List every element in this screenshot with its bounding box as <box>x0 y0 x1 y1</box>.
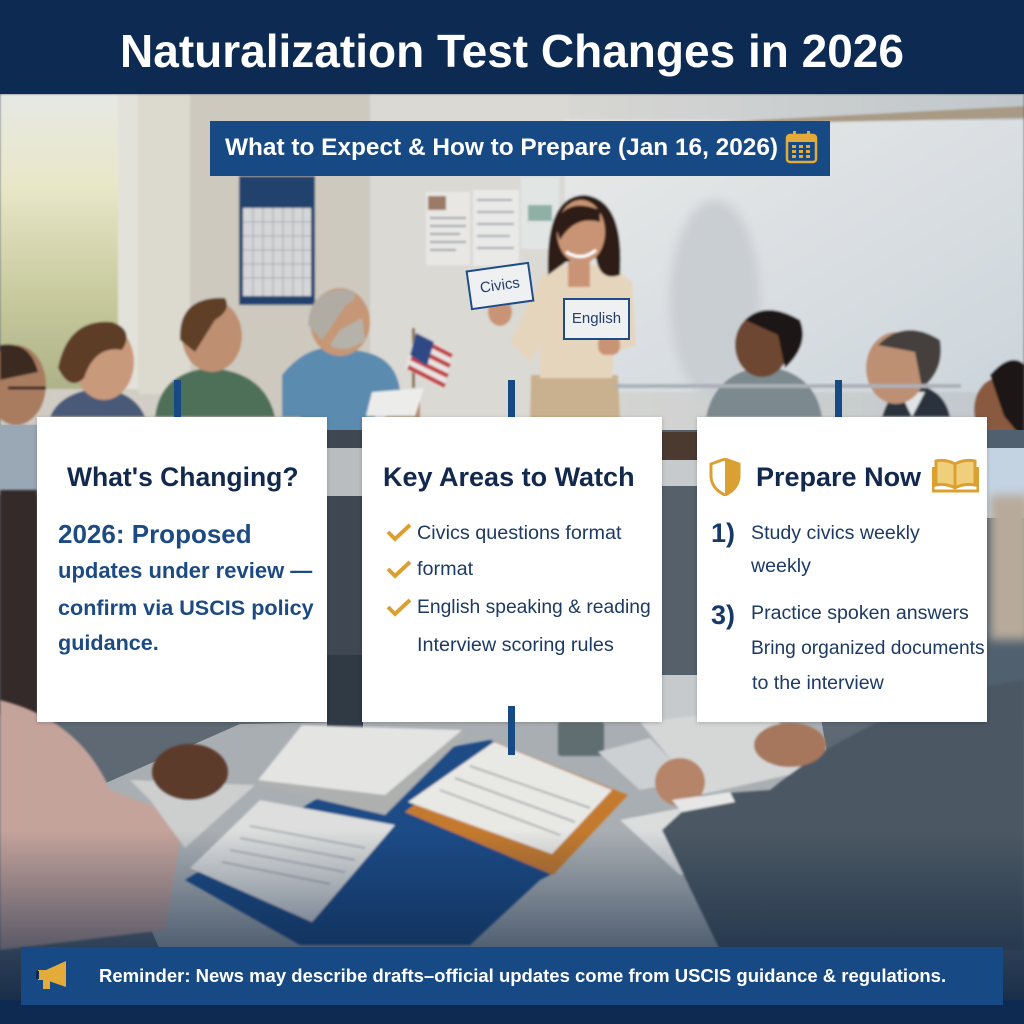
icon: megaphone <box>36 961 66 989</box>
checklist: format <box>417 558 473 580</box>
subtitle: What to Expect & How to Prepare (Jan 16, 2026) <box>225 134 778 161</box>
flag <box>412 328 415 388</box>
left person foreground <box>0 700 185 950</box>
numbered list: 3) <box>711 600 735 630</box>
reminder bar <box>21 947 1003 1005</box>
checklist: Interview scoring rules <box>417 634 614 656</box>
numbered list: weekly <box>751 555 811 577</box>
flashcard: English: English <box>572 310 621 327</box>
pinned papers <box>426 192 470 265</box>
flashcard: Civics: Civics <box>479 274 521 297</box>
panel: what's changing: guidance. <box>58 630 159 655</box>
icon: calendar <box>786 131 818 164</box>
connector: card 2 <box>508 380 515 431</box>
presenter <box>530 375 620 420</box>
bottom vignette <box>0 830 1024 1024</box>
title banner <box>0 0 1024 94</box>
panel: what's changing: 2026: Proposed <box>58 519 252 549</box>
check 1 <box>386 524 412 542</box>
right person foreground <box>662 680 1024 950</box>
table and papers lower area <box>0 722 1024 952</box>
window <box>0 94 122 389</box>
numbered list <box>711 518 985 694</box>
heading: What's Changing? <box>67 462 299 492</box>
heading: Key Areas to Watch <box>383 462 635 492</box>
right people <box>706 366 822 417</box>
check 2 <box>386 560 412 579</box>
reminder text: Reminder: News may describe drafts–official updates come from USCIS guidance & regulations. <box>99 965 946 986</box>
people row <box>0 345 46 425</box>
flashcard: Civics <box>466 262 534 310</box>
wall calendar <box>239 176 315 305</box>
flashcard: English <box>563 298 630 340</box>
panel: what's changing <box>37 417 327 722</box>
icon: shield <box>710 458 740 496</box>
panel: key areas to watch <box>362 417 662 722</box>
checklist <box>386 522 651 656</box>
numbered list: to the interview <box>752 672 884 694</box>
title: Naturalization Test Changes in 2026 <box>120 25 904 77</box>
numbered list: 1) <box>711 518 735 548</box>
check 3 <box>386 598 412 617</box>
panel: what's changing: updates under review — <box>58 558 312 583</box>
blue folder and binders <box>0 680 1024 950</box>
icon: open book <box>932 458 979 492</box>
checklist: English speaking & reading <box>417 597 651 618</box>
numbered list: Bring organized documents <box>751 638 985 659</box>
body text <box>58 519 314 655</box>
connector: card 3 <box>835 380 842 431</box>
connector: lower card 2 <box>508 706 515 755</box>
panel: prepare now <box>697 417 987 722</box>
panel: what's changing: confirm via USCIS policy <box>58 595 314 620</box>
checklist: Civics questions format <box>417 522 621 544</box>
subtitle banner <box>210 121 830 176</box>
connector: card 1 <box>174 380 181 431</box>
numbered list: Study civics weekly <box>751 522 920 544</box>
numbered list: Practice spoken answers <box>751 602 969 624</box>
whiteboard <box>565 120 1024 392</box>
heading: Prepare Now <box>756 462 921 492</box>
